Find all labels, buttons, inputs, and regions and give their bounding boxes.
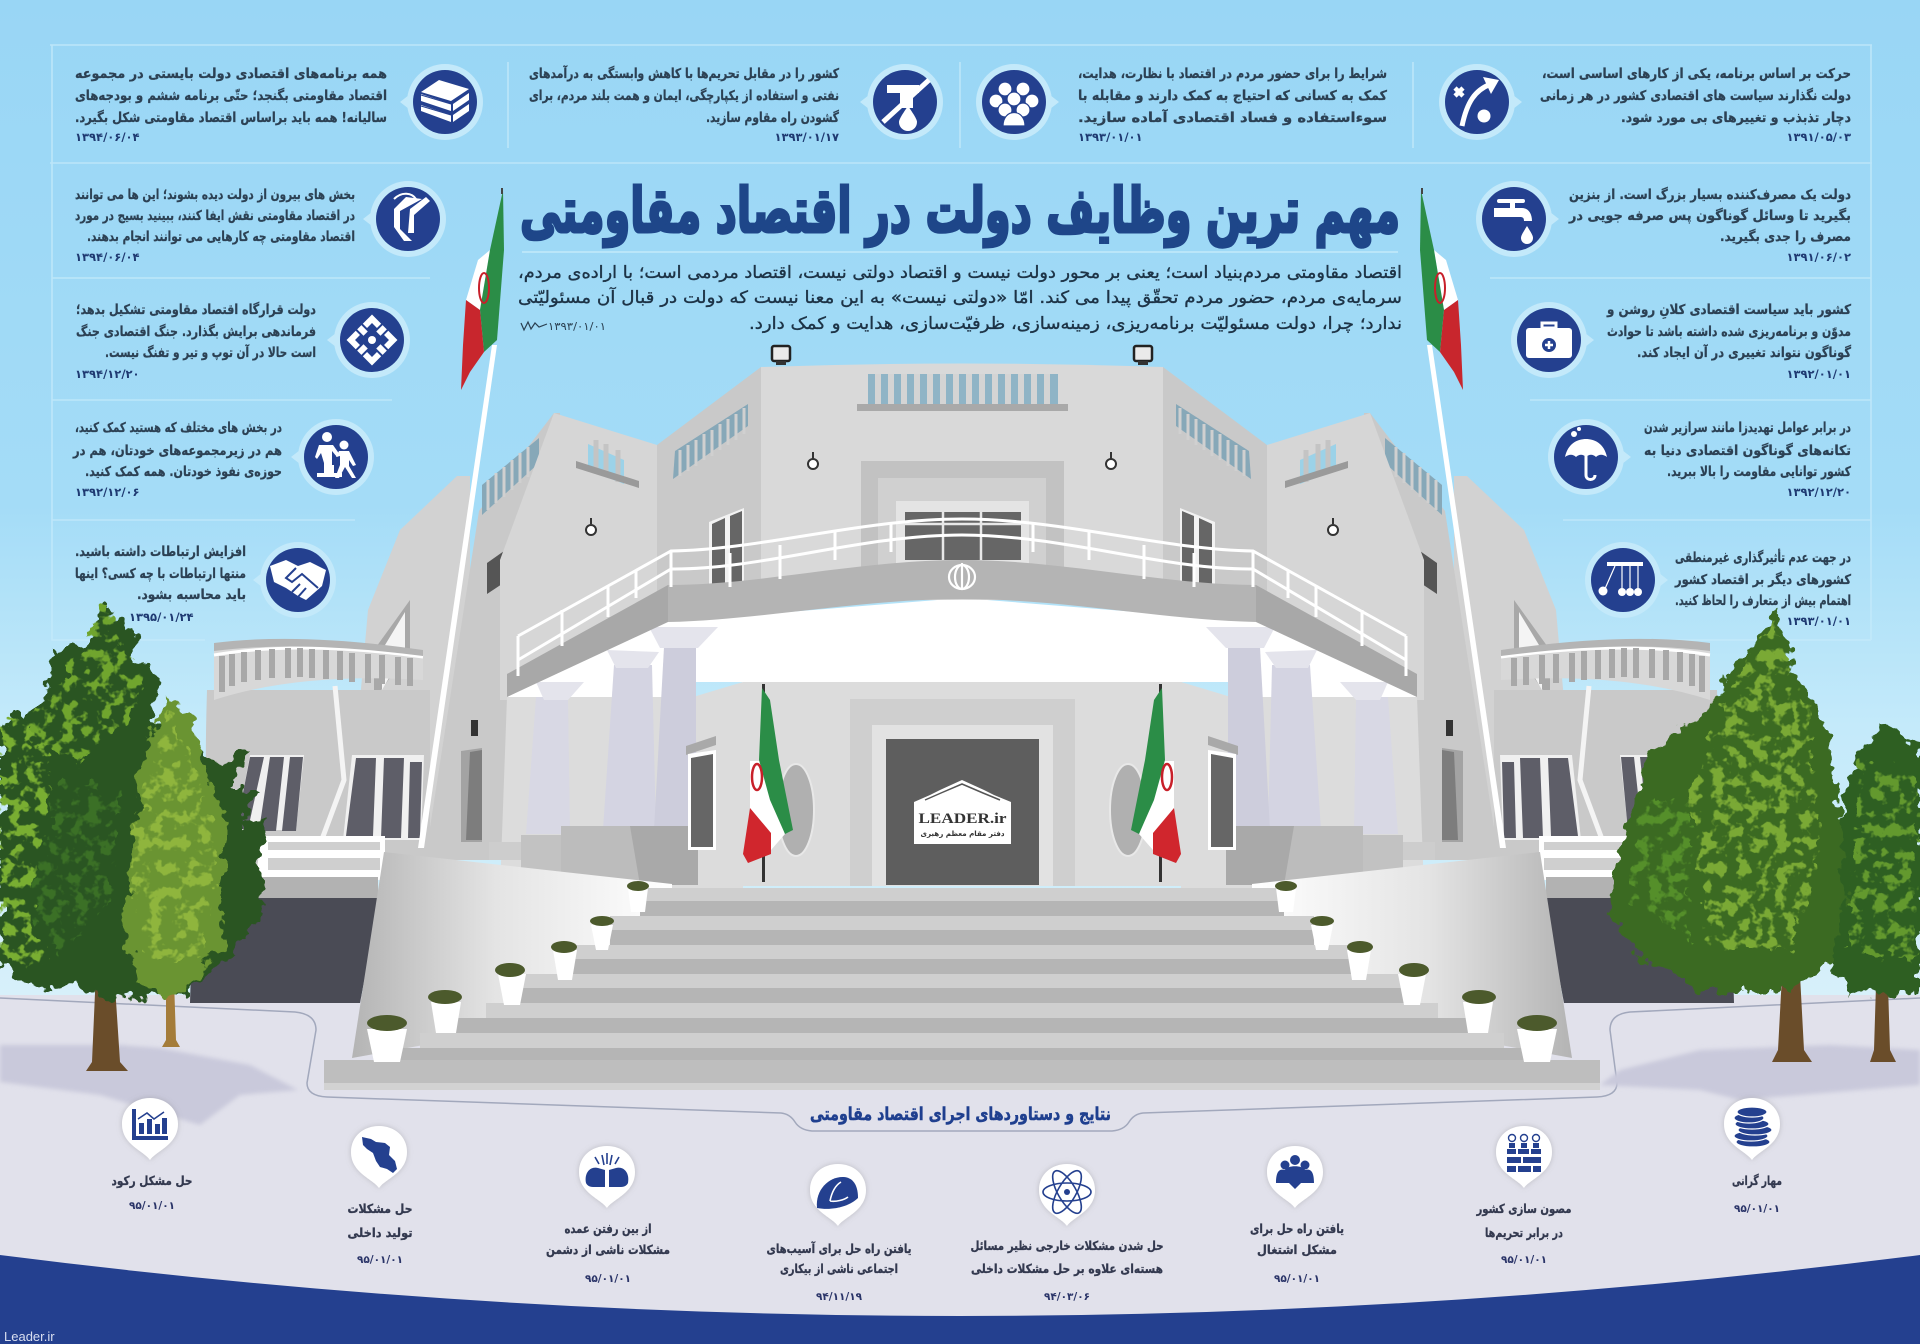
result: enemy problems: ۹۵/۰۱/۰۱ xyxy=(585,1273,631,1285)
icon: helping figures xyxy=(291,419,374,495)
text block: کشور باید سیاست اقتصادی کلانِ روشن و xyxy=(1606,302,1851,319)
icon: coins pin xyxy=(1724,1098,1780,1160)
text block: ۱۳۹۳/۰۱/۰۱ xyxy=(1078,130,1143,144)
left tower side vent xyxy=(482,438,539,515)
presidential building xyxy=(190,188,1734,1058)
text block: هم در زیرمجموعه‌های خودتان، هم در xyxy=(72,443,282,459)
text block: اقتصاد مقاومتی بگنجد؛ حتّی برنامه ششم و بودجه‌های xyxy=(75,87,387,104)
icon: newton cradle xyxy=(1585,542,1668,618)
icon: Iran map pin xyxy=(351,1126,407,1188)
result: domestic production: تولید داخلی xyxy=(348,1225,412,1240)
result: foreign problems: ۹۴/۰۳/۰۶ xyxy=(1044,1291,1090,1303)
icon: faucet xyxy=(1476,181,1559,257)
side window lower xyxy=(461,720,716,850)
results heading: نتایج و دستاوردهای اجرای اقتصاد مقاومتی xyxy=(810,1104,1111,1125)
trees right xyxy=(1605,612,1920,1062)
text block: سوءاستفاده و فساد اقتصادی آماده سازید. xyxy=(1078,109,1387,126)
icon: chart pin xyxy=(122,1098,178,1160)
entrance flag right xyxy=(1131,684,1181,882)
lower back wall xyxy=(500,682,743,890)
result: inflation control: مهار گرانی xyxy=(1732,1173,1782,1188)
lower entrance xyxy=(743,682,1182,886)
text block: در اقتصاد مقاومتی نقش ایفا کنند، ببینید بسیج در مورد xyxy=(75,208,355,224)
poplar foliage xyxy=(125,697,225,1000)
result: inflation control: ۹۵/۰۱/۰۱ xyxy=(1734,1203,1780,1215)
text block: دولت یک مصرف‌کننده بسیار بزرگ است. از بنزین xyxy=(1569,187,1851,203)
text block: دولت قرارگاه اقتصاد مقاومتی تشکیل بدهد؛ xyxy=(76,301,316,318)
door xyxy=(886,739,1039,885)
main right tree xyxy=(1605,612,1850,990)
panel: consumption item xyxy=(1476,181,1851,264)
panel: public participation item xyxy=(976,64,1387,144)
intro paragraph: سرمایه‌ی مردم، حضور مردم تحقّق پیدا می کند. امّا «دولتی نیست» به این معنا نیست که دولت در قبال آن مسئولیّتی xyxy=(518,286,1402,308)
text block: کشورهای دیگر بر اقتصاد کشور xyxy=(1674,571,1851,588)
text block: ۱۳۹۲/۱۲/۲۰ xyxy=(1786,485,1851,499)
text block: ۱۳۹۳/۰۱/۱۷ xyxy=(774,130,839,144)
icon: handshake xyxy=(253,542,336,618)
text block: ۱۳۹۴/۰۶/۰۴ xyxy=(75,130,140,144)
text block xyxy=(75,66,387,144)
side door window xyxy=(709,508,744,590)
icon: emblem xyxy=(363,181,446,257)
text block: افزایش ارتباطات داشته باشید. xyxy=(75,544,246,560)
result: domestic production: ۹۵/۰۱/۰۱ xyxy=(357,1254,403,1266)
text block xyxy=(72,420,282,499)
trees left xyxy=(0,600,266,1071)
icon: books xyxy=(400,64,483,140)
far wing xyxy=(190,476,470,1003)
panel: connections item xyxy=(75,542,336,624)
text block: اقتصاد مقاومتی چه کارهایی می توانند انجام بدهند. xyxy=(87,229,355,245)
icon: headquarters logo xyxy=(327,302,410,378)
panel: help item xyxy=(72,419,374,499)
text block: بگیرید تا وسائل گوناگون پس صرفه جویی در xyxy=(1568,207,1851,224)
intro date and signature: ۱۳۹۳/۰۱/۰۱ xyxy=(548,320,606,333)
result: unemployment harm xyxy=(766,1164,912,1303)
intro paragraph xyxy=(518,263,1402,334)
result: foreign problems: هسته‌ای علاوه بر حل مشکلات داخلی xyxy=(971,1261,1163,1276)
text block: ۱۳۹۱/۰۶/۰۲ xyxy=(1786,250,1851,264)
icon: atom pin xyxy=(1039,1164,1095,1226)
panel: headquarters item xyxy=(75,301,410,381)
text block xyxy=(529,65,839,144)
result: unemployment harm: اجتماعی ناشی از بیکاری xyxy=(780,1261,898,1276)
text block: دولت نگذارند سیاست های اقتصادی کشور در هر زمانی xyxy=(1540,87,1851,104)
left half of building xyxy=(190,188,962,1058)
text block: تکانه‌های گوناگون اقتصادی دنیا به xyxy=(1644,442,1851,459)
text block: ۱۳۹۲/۱۲/۰۶ xyxy=(75,485,140,499)
text block xyxy=(1674,549,1851,628)
text block xyxy=(75,301,316,381)
trunks xyxy=(1772,975,1896,1062)
intro date and signature xyxy=(521,320,606,333)
text block: ۱۳۹۵/۰۱/۲۴ xyxy=(129,610,194,624)
icon: umbrella xyxy=(1548,419,1631,495)
result: inflation control xyxy=(1724,1098,1782,1215)
text block: حوزه‌ی نفوذ خودتان. همه کمک کنید. xyxy=(85,464,282,480)
panel: planning item xyxy=(1439,64,1851,144)
result: unemployment harm: ۹۴/۱۱/۱۹ xyxy=(816,1291,863,1303)
state emblem xyxy=(949,563,975,589)
tower side window xyxy=(487,544,514,594)
text block xyxy=(75,187,355,264)
text block: ۱۳۹۳/۰۱/۰۱ xyxy=(1786,614,1851,628)
result: employment: مشکل اشتغال xyxy=(1257,1242,1337,1257)
text block: منتها ارتباطات با چه کسی؟ اینها xyxy=(75,566,246,582)
text block: در بخش های مختلف که هستید کمک کنید، xyxy=(75,420,282,436)
text block: کشور توانایی مقاومت را بالا ببرید. xyxy=(1667,464,1851,480)
text block: کمک به کسانی که احتیاج به کمک دارند و مقابله با xyxy=(1078,88,1387,104)
text block: ۱۳۹۴/۱۲/۲۰ xyxy=(75,367,140,381)
upper flag xyxy=(418,188,504,848)
text block: ۱۳۹۱/۰۵/۰۳ xyxy=(1786,130,1851,144)
logo: دفتر مقام معظم رهبری xyxy=(920,829,1005,838)
panel: sanctions item xyxy=(529,64,943,144)
ground xyxy=(0,995,1920,1344)
panel: macro policy item xyxy=(1511,302,1851,381)
entrance flag left xyxy=(743,684,793,882)
balcony door recess xyxy=(861,461,1064,581)
icon: first aid kit xyxy=(1511,302,1594,378)
columns xyxy=(489,627,718,885)
upper wall lamps xyxy=(808,452,1116,469)
intro paragraph: ندارد؛ چرا، دولت مسئولیّت برنامه‌ریزی، زمینه‌سازی، ظرفیّت‌سازی، هدایت و کمک دارد. xyxy=(749,314,1402,334)
main title: مهم ترین وظایف دولت در اقتصاد مقاومتی xyxy=(520,174,1400,247)
text block: دچار تذبذب و تغییرهای بی مورد شود. xyxy=(1621,110,1851,126)
result: enemy problems xyxy=(546,1146,670,1285)
text block: بخش های بیرون از دولت دیده بشوند؛ این ها می توانند xyxy=(75,187,355,203)
potted plants xyxy=(367,881,1557,1062)
logo xyxy=(914,780,1011,844)
icon: fists pin xyxy=(579,1146,635,1208)
result: recession xyxy=(112,1098,192,1212)
result: employment: یافتن راه حل برای xyxy=(1250,1221,1344,1236)
text block: نفتی و استفاده از یکپارچگی، ایمان و همت بلند مردم، برای xyxy=(529,87,839,104)
icon: workers pin xyxy=(1267,1146,1323,1208)
text block: کشور را در مقابل تحریم‌ها با کاهش وابستگی به درآمدهای xyxy=(529,65,839,82)
text block: گوناگون نتواند تغییری در آن ایجاد کند. xyxy=(1637,344,1851,361)
balcony railing xyxy=(518,519,1406,676)
text block: مصرف را جدی بگیرید. xyxy=(1720,228,1851,245)
balcony xyxy=(507,519,1417,697)
white soffit under balcony xyxy=(507,598,962,700)
text block: همه برنامه‌های اقتصادی دولت بایستی در مجموعه xyxy=(75,66,387,82)
panel: outside government item xyxy=(75,181,446,264)
top vent xyxy=(857,374,1068,411)
stairs xyxy=(324,888,1600,1090)
wall lamp xyxy=(586,518,596,535)
tower front vent xyxy=(576,440,639,488)
text block xyxy=(75,544,246,624)
result: domestic production: حل مشکلات xyxy=(348,1201,412,1216)
text block: است حالا در آن توپ و تیر و تفنگ نیست. xyxy=(105,344,316,361)
icon: crowd xyxy=(976,64,1059,140)
result: employment: ۹۵/۰۱/۰۱ xyxy=(1274,1273,1320,1285)
panel frame lines xyxy=(50,45,1872,640)
result: enemy problems: مشکلات ناشی از دشمن xyxy=(546,1242,670,1257)
logo: LEADER.ir xyxy=(918,811,1007,827)
result: employment xyxy=(1250,1146,1344,1285)
angled face vent xyxy=(673,404,748,479)
tree shadows xyxy=(0,1045,1920,1125)
text block: باید محاسبه بشود. xyxy=(137,587,246,603)
angled tower face xyxy=(657,367,761,640)
panel: budget programs item xyxy=(75,64,483,144)
text block xyxy=(1606,302,1851,381)
panel: foreign influence item xyxy=(1585,542,1851,628)
result: sanctions immunity: ۹۵/۰۱/۰۱ xyxy=(1501,1254,1547,1266)
result: sanctions immunity: در برابر تحریم‌ها xyxy=(1485,1225,1563,1240)
text block: فرماندهی برایش بگذارد. جنگ اقتصادی جنگ xyxy=(76,323,316,340)
result: recession: حل مشکل رکود xyxy=(112,1173,192,1188)
text block: در جهت عدم تأثیرگذاری غیرمنطقی xyxy=(1675,549,1851,566)
left tower side xyxy=(425,413,560,860)
text block xyxy=(1568,187,1851,264)
text block xyxy=(1078,66,1387,144)
tower front face xyxy=(500,413,657,700)
big tree foliage xyxy=(0,600,266,1000)
plinth wall xyxy=(352,852,672,1058)
mirrored right half of building xyxy=(962,188,1734,1058)
text block: در برابر عوامل تهدیدزا مانند سرازیر شدن xyxy=(1644,420,1851,436)
text block: شرایط را برای حضور مردم در اقتصاد با نظارت، هدایت، xyxy=(1078,66,1387,82)
result: foreign problems: حل شدن مشکلات خارجی نظیر مسائل xyxy=(970,1238,1164,1253)
icon: helmet pin xyxy=(810,1164,866,1226)
result: sanctions immunity xyxy=(1476,1126,1572,1266)
ground frame line xyxy=(0,998,1920,1131)
text block: گشودن راه مقاوم سازید. xyxy=(706,109,839,126)
right tree highlights xyxy=(1850,760,1915,960)
round plaques xyxy=(778,764,1146,856)
bottom blue band xyxy=(0,1255,1920,1344)
title divider xyxy=(522,251,1398,253)
icon: strategy arrow xyxy=(1439,64,1522,140)
text block: حرکت بر اساس برنامه، یکی از کارهای اساسی است، xyxy=(1542,66,1851,82)
panel: threats item xyxy=(1548,419,1851,499)
result: sanctions immunity: مصون سازی کشور xyxy=(1476,1201,1572,1216)
second right tree xyxy=(1825,720,1920,998)
text block: اهتمام بیش از متعارف را لحاظ کنید. xyxy=(1675,593,1851,609)
text block: مدوّن و برنامه‌ریزی شده داشته باشد تا حوادث xyxy=(1607,324,1851,340)
result: domestic production xyxy=(348,1126,412,1266)
intro paragraph: اقتصاد مقاومتی مردم‌بنیاد است؛ یعنی بر محور دولت نیست و اقتصاد دولتی نیست، اقتصاد مردمی است؛ با اراده‌ی مردم، xyxy=(518,263,1402,283)
text block: ۱۳۹۴/۰۶/۰۴ xyxy=(75,250,140,264)
central tower face xyxy=(761,364,1163,600)
text block: ۱۳۹۲/۰۱/۰۱ xyxy=(1786,367,1851,381)
icon: wall pin xyxy=(1496,1126,1552,1188)
result: unemployment harm: یافتن راه حل برای آسیب‌های xyxy=(766,1241,912,1256)
text block: سالیانه! همه باید براساس اقتصاد مقاومتی شکل بگیرد. xyxy=(75,109,387,126)
source credit: Leader.ir xyxy=(4,1329,55,1344)
sky background xyxy=(0,0,1920,1010)
result: foreign problems xyxy=(970,1164,1164,1303)
text block xyxy=(1644,420,1851,499)
floodlight xyxy=(772,346,790,365)
icon: no oil xyxy=(860,64,943,140)
trunks xyxy=(86,970,180,1071)
result: recession: ۹۵/۰۱/۰۱ xyxy=(129,1200,175,1212)
text block xyxy=(1540,66,1851,144)
result: enemy problems: از بین رفتن عمده xyxy=(564,1221,652,1236)
